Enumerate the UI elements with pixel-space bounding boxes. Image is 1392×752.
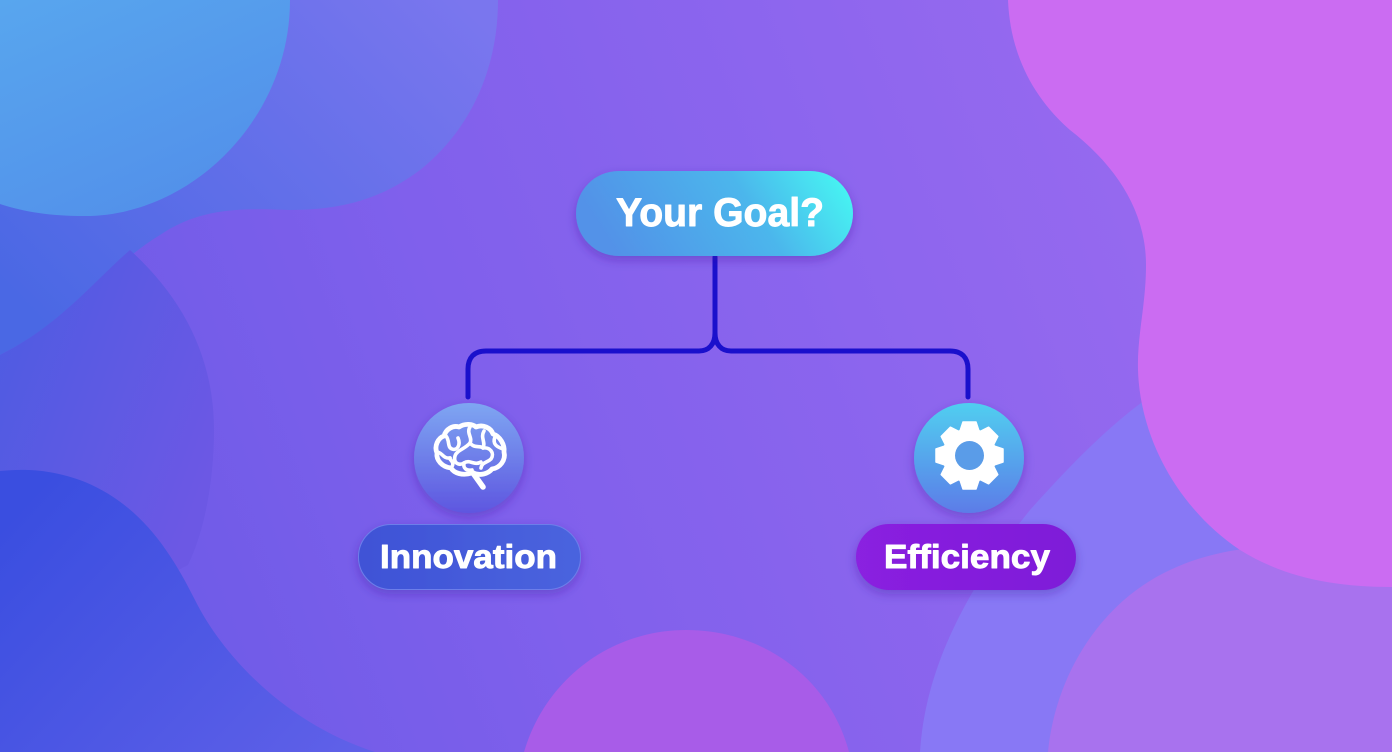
background blob: bottom-left — [0, 470, 375, 752]
node: Efficiency — [856, 524, 1076, 590]
icon: gear — [936, 422, 1003, 489]
background blob: right pink — [1008, 0, 1392, 587]
background blob: bottom circle — [524, 630, 849, 752]
icon: brain — [436, 424, 504, 487]
node: gear icon circle — [914, 403, 1024, 513]
label: Efficiency: Efficiency — [884, 538, 1051, 575]
background blob: left middle — [0, 250, 214, 600]
background blob: top-left circle — [0, 0, 290, 216]
node: Your Goal? — [576, 171, 853, 256]
connector lines — [468, 257, 968, 397]
background blob: top-left large — [0, 0, 498, 355]
background blob: bottom-right lilac — [920, 400, 1392, 752]
label: Your Goal?: Your Goal? — [616, 191, 824, 235]
node: Innovation — [358, 524, 580, 590]
node: brain icon circle — [414, 403, 524, 513]
label: Innovation: Innovation — [380, 538, 557, 575]
background blob: bottom-right inner — [1048, 544, 1392, 752]
